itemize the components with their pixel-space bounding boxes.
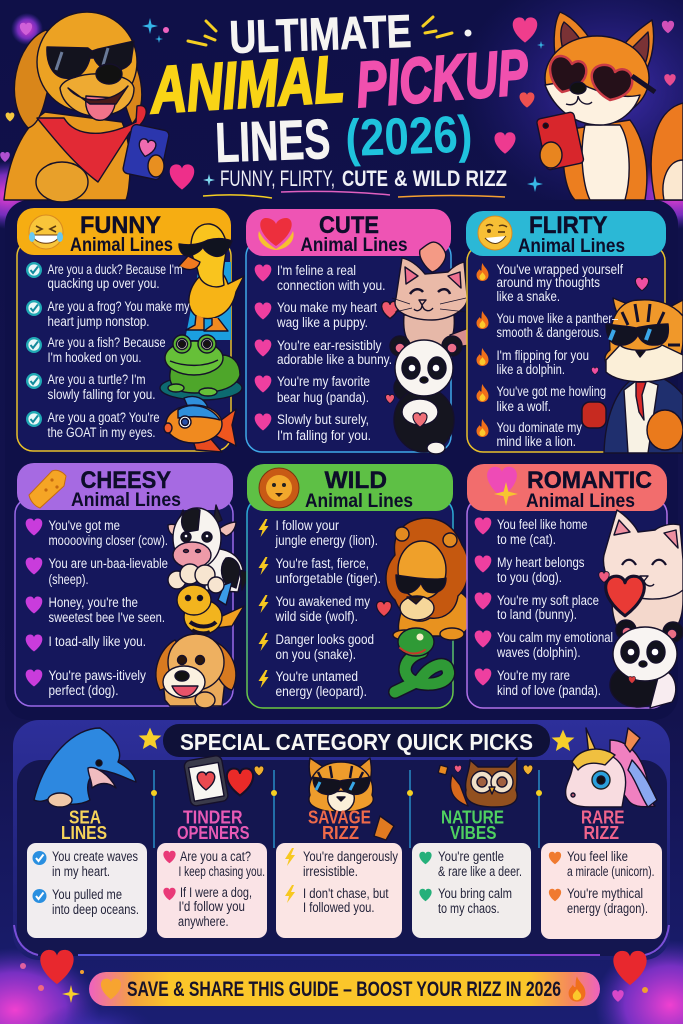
icon: dolphin (34, 728, 136, 807)
cheesy lines: You are un-baa-lievable (48, 556, 168, 571)
card: rare rizz: You're mythical (567, 886, 643, 901)
icon: goldfish (164, 396, 236, 452)
wild header: WILD (324, 467, 387, 494)
card: tinder openers: OPENERS (177, 823, 250, 843)
funny lines: Are you a frog? You make my (48, 299, 190, 314)
funny lines: I'm hooked on you. (48, 350, 142, 365)
flirty header (466, 211, 666, 257)
wild lines: unforgetable (tiger). (276, 571, 381, 586)
wild lines: on you (snake). (276, 647, 356, 662)
title line: (2026): (2026) (344, 106, 473, 168)
card: rare rizz: RIZZ (584, 823, 619, 843)
icon: unicorn (566, 728, 657, 807)
card: savage rizz: You're dangerously (303, 849, 398, 864)
funny lines: the GOAT in my eyes. (48, 425, 156, 440)
card: savage rizz: I don't chase, but (303, 886, 389, 901)
icon: cat hugging heart (599, 510, 683, 641)
flirty lines: smooth & dangerous. (496, 325, 602, 340)
cute lines: wag like a puppy. (276, 315, 368, 330)
cute lines: adorable like a bunny. (277, 352, 392, 367)
card: nature vibes: You're gentle (438, 849, 504, 864)
header decorations (0, 13, 676, 192)
flirty header: FLIRTY (529, 212, 608, 239)
cheesy lines: mooooving closer (cow). (48, 533, 168, 548)
funny lines: Are you a duck? Because I'm (48, 262, 182, 277)
cute lines: You make my heart (277, 300, 377, 315)
flirty lines: You move like a panther– (496, 311, 618, 326)
romantic lines (475, 517, 613, 698)
cheesy lines: (sheep). (48, 572, 88, 587)
romantic header (467, 464, 667, 512)
card: savage rizz: RIZZ (322, 823, 359, 843)
card: rare rizz (541, 808, 662, 939)
card: savage rizz: I followed you. (303, 900, 374, 915)
cute lines: I'm falling for you. (277, 428, 371, 443)
panel: special category quick picks (13, 720, 670, 960)
funny header (17, 208, 231, 256)
flirty lines: You dominate my (496, 420, 582, 435)
icon: phone with heart (183, 755, 264, 807)
title (147, 5, 531, 174)
flirty header: Animal Lines (518, 236, 625, 257)
romantic lines: You're my soft place (497, 593, 599, 608)
title line: ULTIMATE: ULTIMATE (229, 5, 412, 63)
card: sea lines: You create waves (52, 849, 138, 864)
wild lines: You're untamed (276, 669, 358, 684)
cheesy header (17, 463, 233, 511)
icon: snake (395, 628, 449, 692)
title line: ANIMAL: ANIMAL (147, 41, 346, 127)
card: savage rizz: irresistible. (303, 864, 358, 879)
card: savage rizz (276, 808, 402, 938)
card: rare rizz: energy (dragon). (567, 901, 648, 916)
cheesy header: Animal Lines (71, 490, 181, 511)
card: nature vibes: to my chaos. (438, 901, 500, 916)
funny lines: quacking up over you. (48, 276, 160, 291)
card: sea lines: SEA (69, 808, 101, 828)
card: nature vibes: You bring calm (438, 886, 512, 901)
romantic lines: You feel like home (497, 517, 588, 532)
icon: golden retriever with sunglasses (4, 12, 170, 202)
cute lines: Slowly but surely, (277, 412, 369, 427)
panel: funny (17, 208, 244, 452)
wild lines: Danger looks good (276, 632, 374, 647)
icon: owl (438, 758, 533, 807)
wild lines: jungle energy (lion). (275, 533, 378, 548)
icon: frog on lily pad (160, 335, 242, 400)
flirty lines: around my thoughts (496, 275, 600, 290)
funny lines: Are you a fish? Because (48, 335, 166, 350)
card: rare rizz: You feel like (567, 849, 628, 864)
card: savage rizz: SAVAGE (308, 808, 371, 828)
flirty lines: I'm flipping for you (496, 348, 589, 363)
cute lines (255, 263, 392, 443)
funny lines: slowly falling for you. (48, 387, 156, 402)
funny lines: Are you a turtle? I'm (48, 372, 146, 387)
flirty lines: like a snake. (496, 289, 560, 304)
flirty lines: You've wrapped yourself (496, 262, 623, 277)
cute lines: bear hug (panda). (277, 390, 369, 405)
romantic lines: You're my rare (497, 668, 570, 683)
flirty lines: You've got me howling (496, 384, 606, 399)
funny header: FUNNY (80, 212, 161, 239)
romantic lines: My heart belongs (497, 555, 585, 570)
wild lines (258, 518, 381, 699)
romantic lines: kind of love (panda). (497, 683, 601, 698)
icon: fox with heart glasses (536, 12, 683, 200)
cute header: Animal Lines (300, 235, 408, 256)
cheesy lines: perfect (dog). (48, 683, 118, 698)
cheesy lines: You've got me (48, 518, 120, 533)
romantic lines: You calm my emotional (497, 630, 613, 645)
icon: duck with sunglasses (179, 224, 244, 331)
subtitle: CUTE (342, 166, 388, 191)
icon: tiger in suit (582, 277, 683, 453)
cute header: CUTE (319, 212, 379, 239)
cheesy lines: I toad-ally like you. (48, 634, 146, 649)
icon: panda sitting (610, 620, 683, 708)
subtitle: & WILD RIZZ (394, 166, 507, 191)
cheesy lines: You're paws-itively (48, 668, 146, 683)
cute lines: You're my favorite (277, 374, 370, 389)
wild header (247, 464, 453, 512)
dividers (151, 770, 542, 848)
icon: cow (168, 505, 250, 592)
flirty lines: like a wolf. (496, 399, 551, 414)
funny lines (26, 262, 190, 440)
wild lines: I follow your (276, 518, 339, 533)
funny header: Animal Lines (70, 235, 173, 256)
funny lines: heart jump nonstop. (48, 314, 150, 329)
wild lines: energy (leopard). (276, 684, 367, 699)
romantic header: Animal Lines (526, 491, 635, 512)
card: tinder openers: TINDER (183, 808, 242, 828)
subtitle (203, 166, 507, 198)
card: tinder openers: I keep chasing you. (178, 864, 265, 879)
panel: wild (247, 464, 471, 708)
card: nature vibes: VIBES (450, 823, 496, 843)
cheesy lines: Honey, you're the (48, 595, 138, 610)
cute header (246, 209, 451, 256)
panel: cheesy (15, 463, 250, 708)
card: nature vibes (412, 808, 531, 938)
card: sea lines: into deep oceans. (52, 902, 139, 917)
cheesy lines: sweetest bee I've seen. (48, 610, 165, 625)
card: sea lines: LINES (61, 823, 107, 843)
flirty lines: mind like a lion. (496, 434, 576, 449)
bottom decorations (20, 950, 648, 1003)
wild lines: You're fast, fierce, (276, 556, 369, 571)
flirty lines: like a dolphin. (496, 362, 565, 377)
card: sea lines (27, 808, 147, 938)
call to action (89, 972, 600, 1006)
icon: panda (390, 336, 462, 454)
cheesy header: CHEESY (80, 467, 171, 494)
funny lines: Are you a goat? You're (48, 410, 160, 425)
card: tinder openers (157, 808, 267, 938)
title line: PICKUP: PICKUP (353, 36, 531, 121)
romantic lines: to me (cat). (497, 532, 556, 547)
romantic lines: waves (dolphin). (496, 645, 580, 660)
icon: savage tiger (309, 758, 394, 840)
section title: SPECIAL CATEGORY QUICK PICKS (180, 729, 533, 755)
romantic header: ROMANTIC (527, 467, 652, 494)
wild lines: wild side (wolf). (275, 609, 358, 624)
card: tinder openers: If I were a dog, (180, 885, 252, 900)
card: tinder openers: I'd follow you (178, 899, 245, 914)
icon: cat (382, 242, 474, 404)
panel: romantic (467, 464, 683, 708)
wild lines: You awakened my (276, 594, 370, 609)
subtitle: FUNNY, FLIRTY, (220, 166, 335, 191)
romantic lines: to you (dog). (497, 570, 562, 585)
card: nature vibes: & rare like a deer. (438, 864, 522, 879)
wild header: Animal Lines (305, 491, 413, 512)
icon: lion with sunglasses (377, 518, 471, 640)
flirty lines (476, 262, 623, 449)
card: rare rizz: RARE (581, 808, 624, 828)
card: nature vibes: NATURE (441, 808, 504, 828)
cute lines: connection with you. (277, 278, 386, 293)
cheesy lines (26, 518, 168, 698)
card: sea lines: in my heart. (52, 864, 110, 879)
icon: sheep bee (168, 564, 244, 634)
panel: cute (246, 209, 474, 454)
cute lines: You're ear-resistibly (277, 338, 382, 353)
romantic lines: to land (bunny). (497, 607, 577, 622)
icon: puppy (156, 634, 236, 708)
title line: LINES: LINES (214, 107, 331, 174)
card: rare rizz: a miracle (unicorn). (567, 864, 654, 879)
card: sea lines: You pulled me (52, 887, 122, 902)
panel: flirty (466, 211, 683, 453)
card: tinder openers: anywhere. (178, 914, 228, 929)
cute lines: I'm feline a real (277, 263, 356, 278)
card: tinder openers: Are you a cat? (180, 849, 251, 864)
